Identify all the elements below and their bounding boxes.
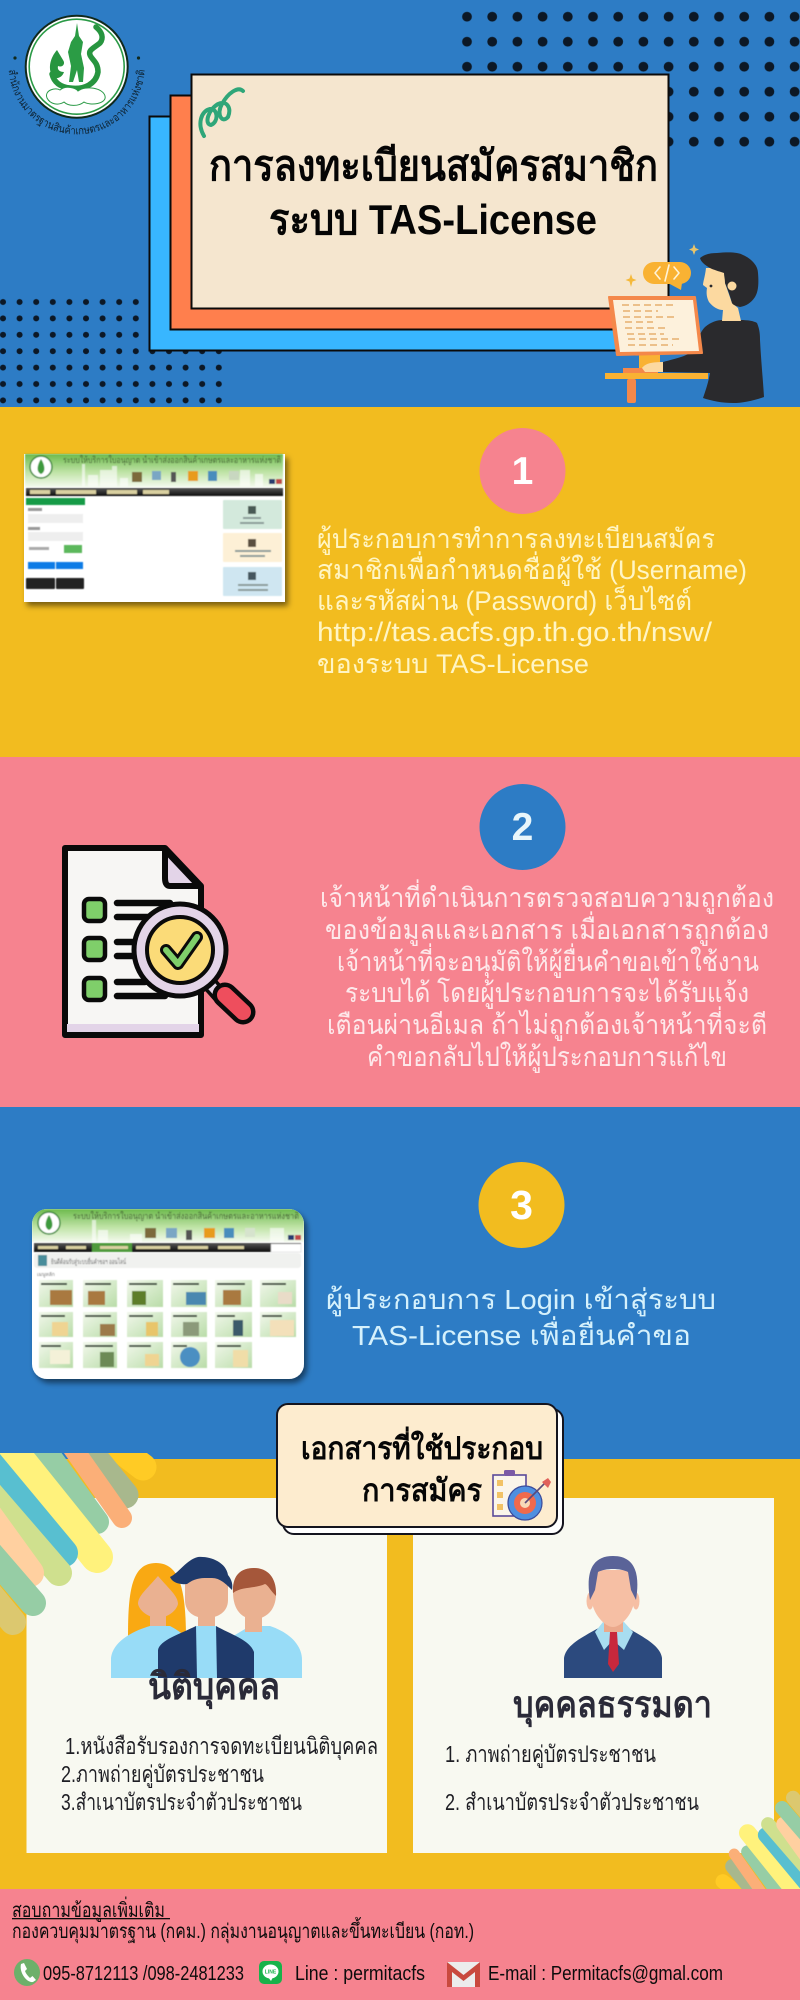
logo: ACFS seal: [8, 14, 145, 134]
step 3 text: ผู้ประกอบการ Login เข้าสู่ระบบ: [326, 1284, 716, 1317]
header background: [0, 0, 800, 407]
step 1 badge: [480, 428, 566, 514]
heading: juristic person: นิติบุคคล: [148, 1666, 280, 1710]
title: การลงทะเบียนสมัครสมาชิก: [209, 142, 658, 189]
panel: natural person: [413, 1498, 774, 1853]
footer background: [0, 1889, 800, 2000]
step 2 text: ระบบได้ โดยผู้ประกอบการจะได้รับแจ้ง: [345, 978, 749, 1009]
step 3 badge: [478, 1162, 564, 1248]
step 1 text: ของระบบ TAS-License: [317, 649, 589, 679]
section 2 background: [0, 757, 800, 1107]
dot pattern: bottom left: [0, 294, 226, 407]
icon: line: [259, 1961, 282, 1984]
icon: mail: [447, 1962, 480, 1987]
step 1 text: สมาชิกเพื่อกำหนดชื่อผู้ใช้ (Username): [317, 551, 747, 586]
email: E-mail : Permitacfs@gmal.com: [488, 1963, 723, 1985]
step 2 text: คำขอกลับไปให้ผู้ประกอบการแก้ไข: [367, 1041, 727, 1073]
step 2 badge: [480, 784, 566, 870]
callout: required documents: การสมัคร: [362, 1473, 482, 1508]
screenshot: service menu: ระบบให้บริการใบอนุญาต นำเข้าส่งออกสินค้าเกษตรและอาหารแห่งชาติ: [73, 1211, 299, 1222]
line id: Line : permitacfs: [295, 1963, 425, 1985]
dot pattern: top right: [454, 4, 800, 154]
step 3 text: [326, 1284, 716, 1351]
list: juristic person documents: 3.สำเนาบัตรประจำตัวประชาชน: [61, 1789, 302, 1815]
step 2 text: เตือนผ่านอีเมล ถ้าไม่ถูกต้องเจ้าหน้าที่จะตี: [327, 1006, 767, 1041]
logo: ACFS seal: สำนักงานมาตรฐานสินค้าเกษตรและอาหารแห่งชาติ: [8, 70, 145, 134]
phone numbers: 095-8712113 /098-2481233: [43, 1963, 244, 1985]
step 1 text: และรหัสผ่าน (Password) เว็บไซต์: [317, 583, 692, 616]
callout: required documents: [277, 1404, 563, 1534]
heading: natural person: บุคคลธรรมดา: [513, 1684, 712, 1728]
screenshot: service menu: [32, 1209, 304, 1379]
list: juristic person documents: 2.ภาพถ่ายคู่บัตรประชาชน: [61, 1761, 264, 1788]
panel: juristic person: [26, 1498, 387, 1853]
list: juristic person documents: 1.หนังสือรับรองการจดทะเบียนนิติบุคคล: [65, 1733, 378, 1760]
title card stack: [150, 74, 668, 350]
step 2 text: [320, 879, 774, 1073]
step 3 text: TAS-License เพื่อยื่นคำขอ: [352, 1316, 691, 1351]
documents section background: [0, 1459, 800, 1889]
decoration: colored stripes bottom right: [723, 1798, 800, 1901]
icon: line: LINE: [265, 1970, 277, 1976]
list: natural person documents: 1. ภาพถ่ายคู่บัตรประชาชน: [445, 1741, 656, 1768]
screenshot: service menu: ยินดีต้อนรับสู่ระบบยื่นคำขอฯ ออนไลน์: [51, 1257, 126, 1266]
decorative squiggle: [200, 89, 243, 136]
decoration: colored stripes top left: [0, 1430, 143, 1622]
step 2 text: ของข้อมูลและเอกสาร เมื่อเอกสารถูกต้อง: [325, 911, 769, 946]
step 1 text: http://tas.acfs.gp.th.go.th/nsw/: [317, 617, 713, 647]
section 3 background: [0, 1107, 800, 1459]
title: ระบบ TAS-License: [269, 196, 597, 243]
list: natural person documents: 2. สำเนาบัตรประจำตัวประชาชน: [445, 1789, 699, 1815]
step 1 text: [317, 524, 747, 679]
illustration: businessman: [564, 1556, 662, 1678]
step 1 text: ผู้ประกอบการทำการลงทะเบียนสมัคร: [317, 524, 715, 555]
illustration: programmer at desk: [605, 244, 764, 403]
icon: phone: [14, 1959, 40, 1986]
step 2 text: เจ้าหน้าที่ดำเนินการตรวจสอบความถูกต้อง: [320, 879, 774, 914]
list: natural person documents: [445, 1741, 699, 1815]
title: [209, 142, 658, 243]
screenshot: login page: [24, 454, 285, 602]
step 1 badge: 1: [512, 450, 533, 493]
callout: required documents: เอกสารที่ใช้ประกอบ: [301, 1426, 543, 1466]
step 2 badge: 2: [512, 806, 533, 849]
screenshot: service menu: เมนูหลัก: [37, 1272, 55, 1278]
icon: document with magnifying glass: [65, 848, 243, 1035]
illustration: group of three people: [111, 1557, 302, 1678]
screenshot: login page: ระบบให้บริการใบอนุญาต นำเข้าส่งออกสินค้าเกษตรและอาหารแห่งชาติ: [63, 455, 281, 466]
icon: clipboard and target: [493, 1470, 551, 1520]
section 1 background: [0, 407, 800, 757]
footer department: กองควบคุมมาตรฐาน (กคม.) กลุ่มงานอนุญาตและขึ้นทะเบียน (กอท.): [12, 1917, 474, 1944]
list: juristic person documents: [61, 1733, 378, 1815]
footer heading: สอบถามข้อมูลเพิ่มเติม: [12, 1896, 165, 1923]
step 3 badge: 3: [510, 1182, 533, 1228]
